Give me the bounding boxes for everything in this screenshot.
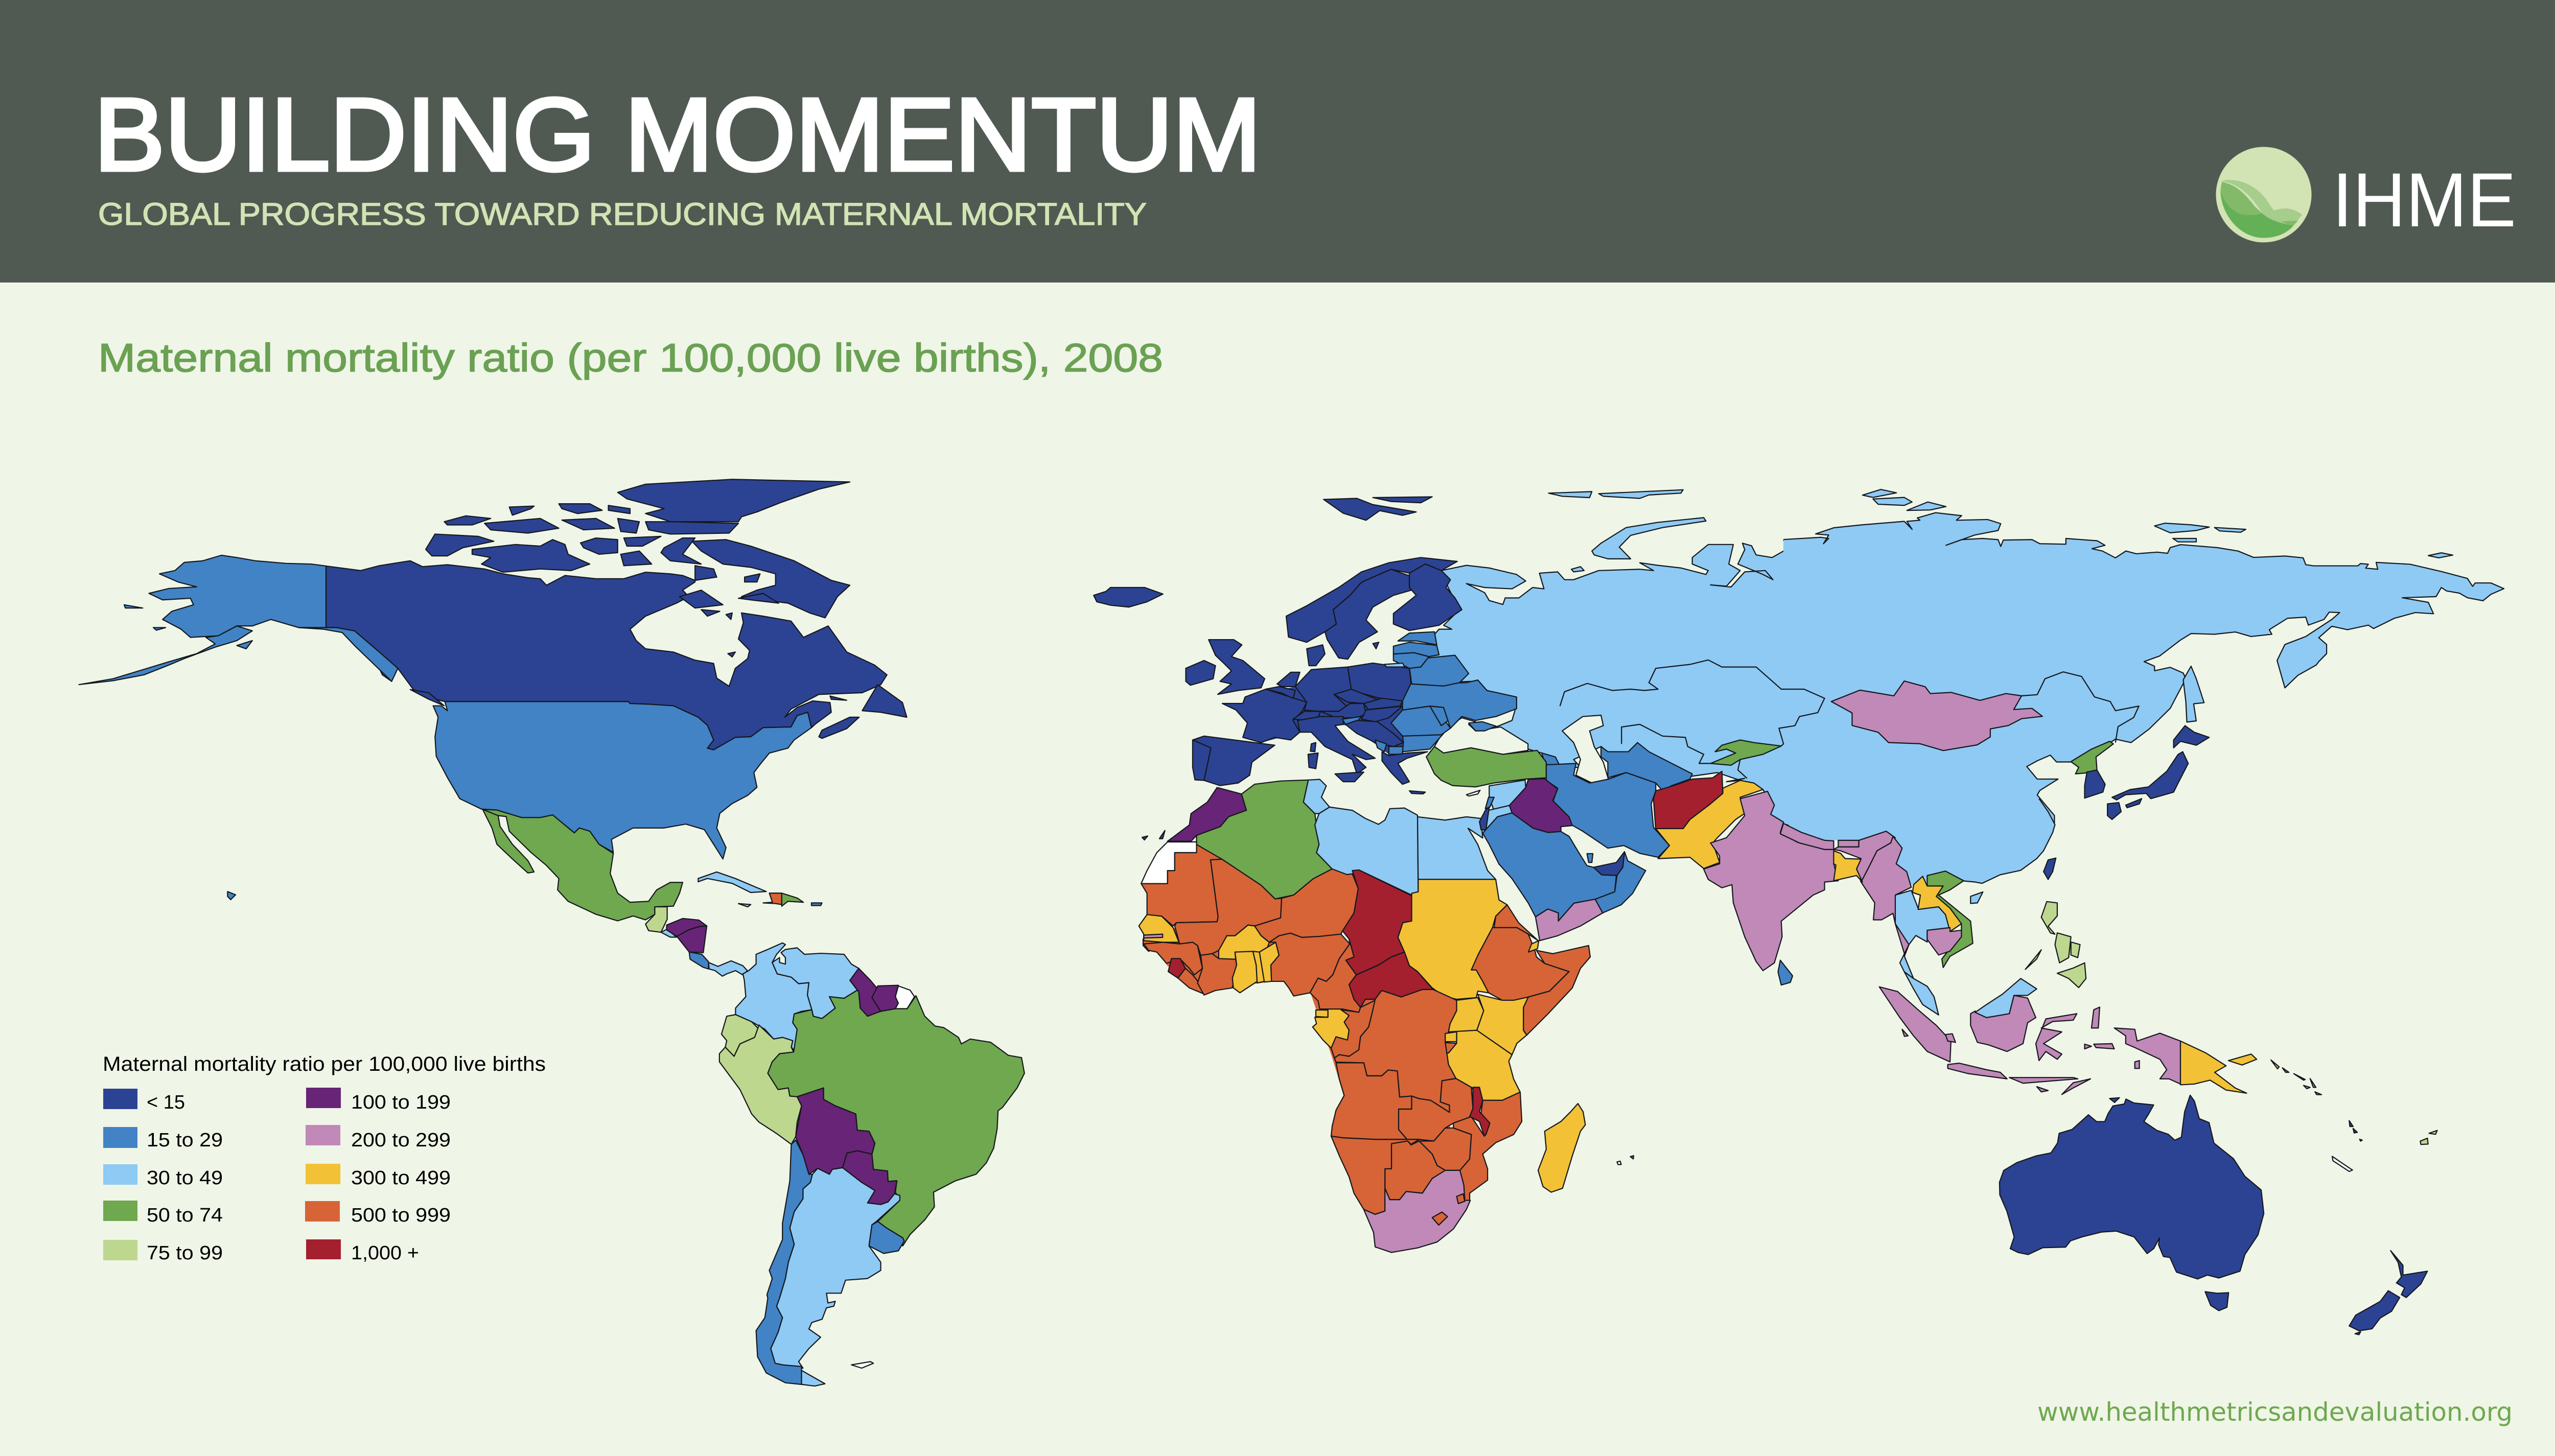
Franz Josef Land [1548,491,1592,498]
Papua New Guinea [2180,1041,2246,1093]
Guinea [1144,942,1202,975]
Burkina Faso [1219,925,1269,959]
Northeast India [1833,831,1895,882]
New Siberian Islands [2154,523,2209,533]
Poland [1348,663,1412,701]
logo: IHME: IHME [2332,157,2516,243]
Honduras [667,919,707,936]
China coast [1961,799,2055,883]
Australia [2000,1095,2264,1279]
DR Congo [1334,990,1457,1112]
Slovenia [1342,717,1361,724]
Java [1948,1063,2007,1079]
Canada [326,561,887,750]
United Kingdom [1209,640,1265,694]
South Africa [1364,1170,1470,1253]
Germany [1295,667,1352,711]
United States [433,701,811,859]
Caspian Sea [1562,715,1609,783]
Syria [1489,780,1526,811]
legend: 200 to 299: 200 to 299 [351,1130,451,1151]
Cambodia [1927,928,1961,955]
legend: 30 to 49 [103,1164,223,1189]
Belarus [1409,655,1469,686]
Hainan [1970,892,1983,903]
map region: South and Southeast Asia [1704,725,2257,1094]
Canada: smaller Arctic islands [444,504,779,620]
Saudi Arabia [1483,813,1616,921]
logo: IHME [2216,147,2516,243]
Svalbard [1323,499,1416,520]
Canary Islands [1159,831,1165,839]
Dominican Republic [782,893,803,906]
legend: 30 to 49: 30 to 49 [147,1167,223,1189]
Chile [756,1140,812,1384]
Venezuela [772,948,858,1019]
legend: 15 to 29 [103,1127,223,1151]
legend: 100 to 199: 100 to 199 [351,1092,451,1113]
New Zealand [2349,1251,2427,1335]
title: BUILDING MOMENTUM [94,77,1261,192]
Uganda [1449,998,1483,1032]
Solomon Islands [2294,1074,2305,1080]
Alaska Peninsula [79,626,252,685]
Falkland Islands [851,1361,873,1368]
Nigeria [1269,933,1350,996]
El Salvador [661,929,677,937]
Guatemala and Belize [645,907,667,932]
Estonia [1398,632,1437,645]
Angola [1331,1063,1412,1139]
Zambia [1399,1078,1473,1141]
Laos [1913,876,1961,931]
Ethiopia [1471,928,1569,1000]
Indonesian islands [1902,1007,2140,1094]
Ecuador [722,1015,759,1056]
Libya [1315,807,1418,895]
Switzerland [1293,711,1320,720]
Continental Europe underlay [1261,667,1412,755]
map region: Africa and Arabia [1139,779,1645,1253]
Yemen [1536,899,1602,941]
French Guiana [895,986,915,1009]
legend [103,1053,546,1264]
legend: 50 to 74: 50 to 74 [147,1205,223,1226]
Guyana [850,968,881,1016]
Oman [1595,852,1645,913]
Morocco [1168,787,1246,841]
Sub-Saharan Africa underlay [1164,916,1450,1173]
Lesotho [1432,1212,1448,1225]
Bhutan [1838,840,1859,847]
Equatorial Guinea [1316,1010,1328,1017]
Jamaica [738,904,751,907]
legend: 500 to 999: 500 to 999 [351,1205,451,1226]
map region: Northern Eurasia land mass [1407,490,1804,830]
Tanzania [1447,1030,1520,1100]
China [1740,791,2055,885]
Canada: Vancouver Island [410,690,444,706]
Mauritius and Reunion [1631,1156,1634,1159]
Zimbabwe [1419,1128,1471,1170]
Peru [719,1025,802,1144]
Israel [1479,807,1489,830]
Russia and Central Asia (west) [1407,539,1804,830]
Eritrea [1494,905,1538,941]
Belgium [1266,687,1295,698]
Sudan [1398,879,1507,999]
Canada: Newfoundland [862,685,907,717]
map region: Russia east [1769,513,2504,825]
Mexico [483,809,683,921]
Guinea-Bissau [1143,939,1164,951]
Fiji [2420,1138,2428,1144]
Western Balkans [1345,720,1403,746]
Turkey [1426,746,1546,787]
legend: less than 15: < 15 [147,1092,185,1113]
Mongolia [1831,681,2042,750]
Greece [1382,752,1428,784]
Kenya [1477,994,1528,1054]
Bangladesh [1833,851,1863,882]
Iraq [1509,779,1572,832]
Cameroon [1310,939,1360,1013]
legend: 75 to 99: 75 to 99 [147,1242,223,1264]
Hawaii [227,891,236,900]
Djibouti [1528,941,1539,952]
Cuba [698,872,766,893]
Sumatra [1879,987,1951,1062]
Colombia [735,943,812,1050]
Vanuatu [2349,1121,2353,1126]
Latvia [1393,642,1439,656]
legend: 1,000 plus [306,1239,419,1264]
Afghanistan [1654,771,1723,830]
Philippines [2025,902,2086,988]
legend: less than 15 [103,1089,185,1113]
Turkmenistan [1601,743,1692,791]
subtitle: GLOBAL PROGRESS TOWARD REDUCING MATERNAL MORTALITY [98,197,1147,231]
map region: Oceania [2000,1060,2437,1335]
Taiwan [2043,858,2056,879]
Canada: Baffin Island [692,539,850,618]
Tunisia [1304,780,1330,813]
Somalia [1523,946,1590,1035]
world map [79,479,2504,1386]
legend: 15 to 29: 15 to 29 [147,1130,223,1151]
Moldova [1430,706,1452,725]
legend: 100 to 199 [306,1088,451,1113]
website URL: www.healthmetricsandevaluation.org [2037,1397,2513,1427]
Qatar [1587,854,1593,862]
Black Sea [1434,718,1528,755]
Borneo (Malaysia) [1975,978,2037,1018]
Spain [1193,736,1275,786]
Thailand [1895,890,1950,978]
Canada: Banks Island [426,534,494,556]
Severnaya Zemlya [1863,489,1896,498]
Burundi [1445,1043,1457,1053]
Kaliningrad [1384,663,1405,667]
Alaska [149,555,326,638]
legend: 50 to 74 [103,1201,223,1226]
Pakistan [1656,781,1763,868]
Lebanon [1485,797,1494,809]
Nepal [1780,824,1833,850]
Albania and Macedonia [1375,740,1386,752]
India [1704,791,1838,971]
Tajikistan border [1738,760,1747,778]
New Britain [2228,1054,2257,1065]
Bulgaria [1403,734,1444,752]
Ukraine [1403,680,1517,729]
Italy [1297,717,1375,774]
Canada: Ellesmere Island [618,479,850,522]
Bougainville [2271,1060,2279,1069]
Netherlands [1277,672,1300,687]
Sulawesi [2036,1014,2077,1061]
Novaya Zemlya [1592,518,1706,559]
legend: 200 to 299 [306,1125,451,1151]
Ivory Coast [1198,954,1237,995]
Suriname [872,985,898,1012]
Lithuania [1393,653,1429,668]
Ghana [1233,951,1257,993]
Sierra Leone [1168,958,1186,978]
Bolivia [796,1088,875,1175]
Mozambique [1453,1092,1522,1201]
Vietnam [1927,871,1973,968]
Sakhalin [2183,666,2204,722]
Myanmar [1861,836,1911,954]
Mali [1175,859,1282,955]
Kyrgyzstan [1710,740,1781,765]
Brazil [768,990,1025,1246]
South Korea [2085,770,2105,798]
map region: North America [79,479,907,937]
Norway [1286,557,1457,642]
Western Sahara [1141,842,1197,884]
UAE [1593,852,1624,876]
Iran [1546,763,1669,857]
Panama [709,961,747,976]
Kazakhstan border [1560,660,1825,746]
Gabon [1313,1009,1349,1048]
Algeria [1197,780,1332,899]
Denmark [1307,645,1325,666]
Gambia [1144,934,1163,938]
Botswana [1385,1141,1445,1200]
legend title: Maternal mortality ratio per 100,000 live births [103,1053,546,1075]
map heading: Maternal mortality ratio (per 100,000 live births), 2008 [98,335,1163,380]
Western New Guinea [2115,1028,2180,1084]
Romania [1391,706,1450,736]
Republic of Congo [1331,1000,1375,1058]
Finland [1393,564,1462,630]
Haiti [763,893,782,905]
Austria [1320,703,1366,718]
Crimea [1469,722,1496,731]
header band [0,0,2555,283]
Togo [1253,951,1264,983]
Paraguay [843,1151,897,1205]
Swaziland [1457,1194,1465,1204]
Alaska panhandle [299,627,398,682]
Baja California [483,809,534,873]
Hungary [1361,706,1403,722]
Tasmania [2205,1291,2228,1310]
Malaysia (peninsula) [1904,972,1939,1015]
legend: 75 to 99 [103,1240,223,1264]
legend: 300 to 499: 300 to 499 [351,1167,451,1189]
Benin [1260,942,1279,982]
Wrangel Island [2428,553,2453,558]
Uzbekistan border [1621,724,1710,763]
Canada: Nova Scotia [819,717,859,738]
Niger [1255,869,1358,942]
France [1222,689,1307,743]
Ireland [1186,661,1216,685]
Puerto Rico [811,903,822,906]
legend: 300 to 499 [306,1164,451,1189]
Canada: Victoria Island [472,539,590,572]
Japan [2107,725,2209,819]
Liberia [1178,968,1205,994]
Costa Rica [689,952,709,969]
Egypt [1418,817,1496,879]
legend: 500 to 999 [305,1201,451,1226]
Senegal [1139,914,1179,942]
legend: 1,000 plus: 1,000 + [351,1242,419,1264]
Nicaragua [677,926,707,953]
Mauritania [1141,844,1222,926]
Argentina [771,1168,900,1368]
Czech Republic [1334,689,1378,703]
Cyprus [1467,790,1480,796]
map region: Far East islands and Mongolia [1831,489,2453,750]
Slovakia [1364,698,1403,710]
New Caledonia [2332,1157,2353,1171]
Russia–China border [2022,672,2139,743]
Madagascar [1538,1103,1585,1192]
Portugal [1193,740,1211,781]
North Korea [2071,741,2113,774]
Russia (east) [1769,513,2504,825]
Sri Lanka [1778,960,1793,985]
map region: China south [1740,791,2055,885]
Uruguay [869,1222,904,1253]
map region: South America [667,919,1025,1386]
Sweden [1325,569,1412,659]
Malawi [1470,1087,1490,1136]
Chad [1342,870,1412,975]
Jordan [1484,806,1512,832]
Borneo (Indonesia) [1970,995,2036,1051]
Central African Republic [1349,952,1433,1007]
Iceland [1094,588,1163,607]
Rwanda [1445,1032,1457,1042]
map region: Europe and Western Asia [1094,497,1825,868]
Namibia [1331,1136,1419,1214]
Georgia, Armenia and Azerbaijan [1542,753,1560,767]
